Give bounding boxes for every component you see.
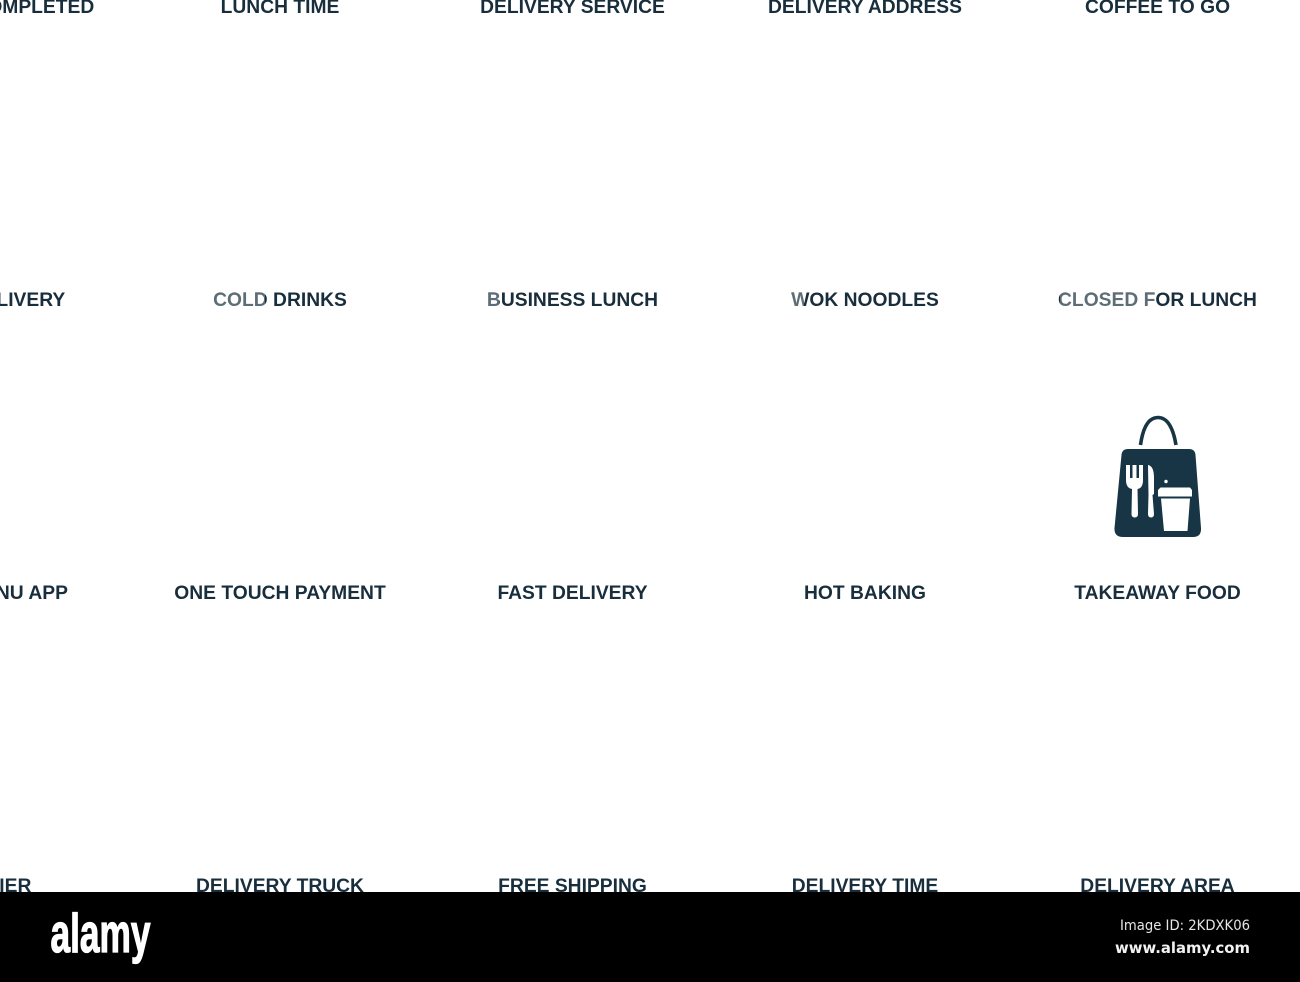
logo: alamy: alamy: [50, 902, 151, 964]
footer: black watermark bar: [0, 892, 1300, 982]
label: one touch payment: ONE TOUCH PAYMENT: [174, 583, 386, 604]
label: fast delivery: FAST DELIVERY: [497, 583, 648, 604]
label: delivery area: DELIVERY AREA: [1080, 876, 1235, 897]
label: cold drinks: COLD DRINKS: [213, 290, 347, 311]
label: closed for lunch: CLOSED FOR LUNCH: [1058, 290, 1257, 311]
label: delivery time: DELIVERY TIME: [792, 876, 938, 897]
icon: takeaway food bag: [1114, 416, 1202, 537]
label: business lunch: BUSINESS LUNCH: [487, 290, 658, 311]
label: delivery truck: DELIVERY TRUCK: [196, 876, 364, 897]
website url: www.alamy.com: [1115, 939, 1250, 957]
image id: Image ID: 2KDXK06: [1120, 918, 1250, 934]
label: free shipping: FREE SHIPPING: [498, 876, 647, 897]
label: wok noodles: WOK NOODLES: [791, 290, 939, 311]
label: hot baking: HOT BAKING: [804, 583, 926, 604]
label: takeaway food: TAKEAWAY FOOD: [1074, 583, 1241, 604]
